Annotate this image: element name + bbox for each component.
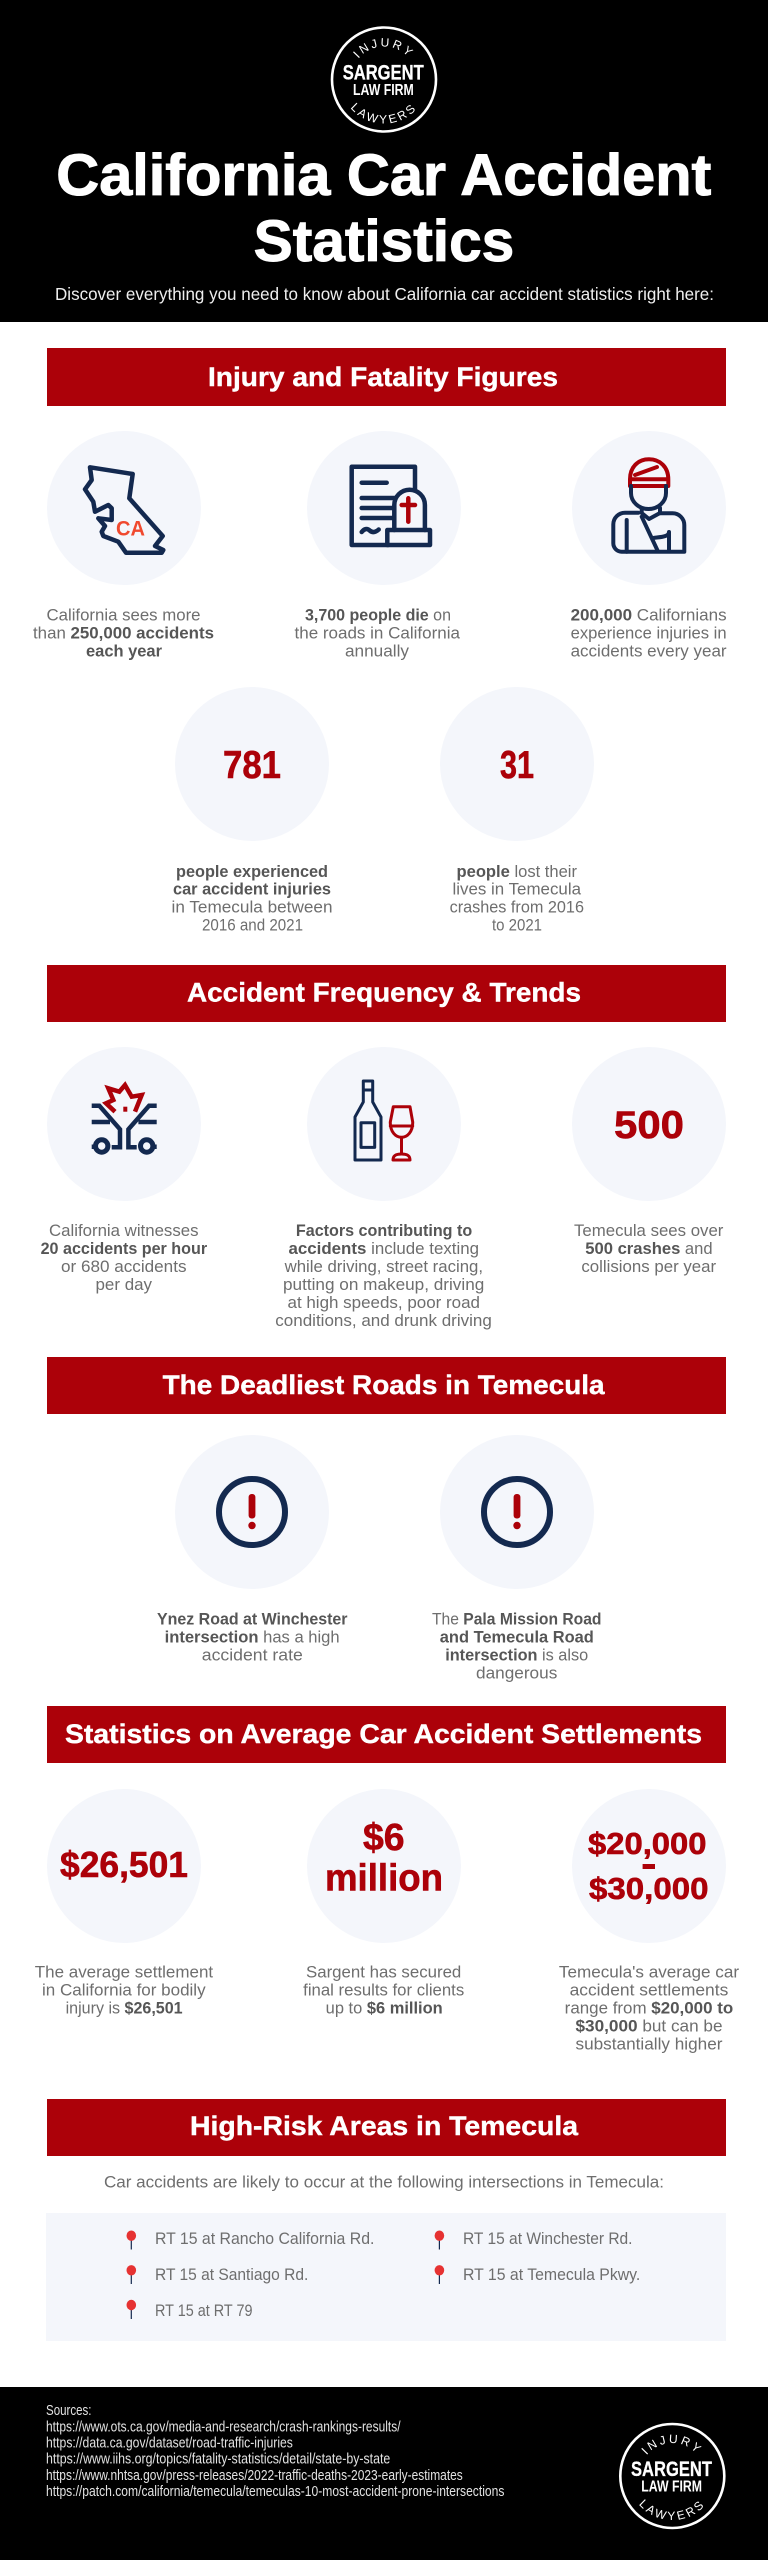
- text: 200,000 Californians: [571, 607, 727, 625]
- number: 500: [614, 1104, 684, 1147]
- text: at high speeds, poor road: [288, 1294, 480, 1312]
- intro text: Car accidents are likely to occur at the following intersections in Temecula:: [104, 2173, 664, 2191]
- text: per day: [96, 1276, 153, 1294]
- text: The Pala Mission Road: [432, 1610, 602, 1628]
- item: RT 79: [126, 2300, 252, 2320]
- number: $30,000: [589, 1871, 708, 1906]
- stat: $26,501: [35, 1789, 214, 2018]
- heading band: The Deadliest Roads in Temecula: [163, 1370, 606, 1400]
- text: people experienced: [176, 863, 328, 881]
- logo: Sargent Law Firm: LAWYERS: [639, 2499, 703, 2520]
- number: 781: [223, 744, 281, 787]
- logo: Sargent Law Firm: INJURY: [641, 2434, 702, 2454]
- number: $20,000: [588, 1826, 706, 1861]
- panel: intersections list: [46, 2213, 726, 2341]
- stat: contributing factors: [275, 1047, 492, 1330]
- text: [574, 1222, 724, 1276]
- heading band: Accident Frequency & Trends: [187, 978, 581, 1008]
- number: $6: [363, 1817, 405, 1859]
- text: 500 crashes and: [585, 1240, 713, 1258]
- icon: document and gravestone: [352, 467, 430, 545]
- text: car accident injuries: [173, 881, 331, 899]
- logo: Sargent Law Firm: LAWYERS: [350, 102, 415, 124]
- text: [33, 607, 214, 661]
- text: $30,000 but can be: [576, 2018, 722, 2036]
- logo: Sargent Law Firm: INJURY: [353, 38, 414, 58]
- text: [157, 1610, 348, 1664]
- section: Injury and Fatality Figures: [33, 348, 727, 934]
- section: Statistics on Average Car Accident Settlements: [35, 1706, 740, 2054]
- footer band: [0, 2387, 768, 2560]
- logo: Sargent Law Firm: LAW FIRM: [353, 82, 414, 99]
- text: The average settlement: [35, 1964, 214, 1982]
- stat: 250,000 accidents: [33, 431, 214, 661]
- logo: Sargent Law Firm: SARGENT: [343, 61, 424, 84]
- heading band: [47, 2099, 726, 2156]
- text: [41, 1222, 208, 1294]
- text: final results for clients: [303, 1982, 464, 2000]
- icon: California map: [85, 467, 163, 553]
- text: Temecula sees over: [574, 1222, 724, 1240]
- text: Sargent has secured: [306, 1964, 461, 1982]
- text: [559, 1964, 740, 2054]
- text: substantially higher: [576, 2036, 723, 2054]
- text: Ynez Road at Winchester: [157, 1610, 348, 1628]
- text: crashes from 2016: [450, 899, 584, 917]
- text: 20 accidents per hour: [41, 1240, 208, 1258]
- logo: Sargent Law Firm: LAW FIRM: [641, 2478, 702, 2496]
- text: in Temecula between: [172, 899, 332, 917]
- section: The Deadliest Roads in Temecula: [47, 1357, 726, 1682]
- stat: $20,000 - $30,000: [559, 1789, 740, 2054]
- text: California witnesses: [49, 1222, 198, 1240]
- icon: alert: [484, 1479, 550, 1545]
- number: $26,501: [60, 1844, 188, 1885]
- text: than 250,000 accidents: [33, 625, 214, 643]
- icon: alert: [219, 1479, 285, 1545]
- stat: 200,000 Californians: [571, 431, 727, 661]
- text: range from $20,000 to: [565, 2000, 733, 2018]
- text: injury is $26,501: [66, 2000, 183, 2018]
- text: accidents every year: [571, 643, 727, 661]
- logo: Sargent Law Firm: [330, 26, 438, 133]
- section: Accident Frequency & Trends: [41, 965, 726, 1330]
- sources: https://www.nhtsa.gov/press-releases/2022-traffic-deaths-2023-early-estimates: [46, 2468, 463, 2484]
- sources: https://data.ca.gov/dataset/road-traffic-injuries: [46, 2436, 293, 2452]
- text: and Temecula Road: [440, 1628, 594, 1646]
- road: Ynez Road: [157, 1435, 348, 1664]
- text: [35, 1964, 214, 2018]
- text: dangerous: [476, 1664, 557, 1682]
- text: each year: [86, 643, 163, 661]
- text: people lost their: [456, 863, 578, 881]
- text: intersection is also: [445, 1646, 588, 1664]
- item: Temecula Pkwy: RT 15 at Temecula Pkwy.: [463, 2266, 640, 2284]
- number: 31: [500, 744, 534, 787]
- text: 3,700 people die on: [305, 607, 451, 625]
- subtitle: Discover everything you need to know about California car accident statistics right here:: [55, 284, 714, 304]
- text: or 680 accidents: [61, 1258, 186, 1276]
- heading band: [47, 348, 726, 406]
- header band: [0, 0, 768, 322]
- item: Rancho California: RT 15 at Rancho California Rd.: [155, 2230, 374, 2248]
- text: while driving, street racing,: [284, 1258, 483, 1276]
- text: [571, 607, 727, 661]
- text: Factors contributing to: [296, 1222, 472, 1240]
- item: Santiago: RT 15 at Santiago Rd.: [155, 2266, 308, 2284]
- icon: injured person: [613, 459, 684, 552]
- item: Winchester: RT 15 at Winchester Rd.: [463, 2230, 632, 2248]
- sources: https://www.iihs.org/topics/fatality-statistics/detail/state-by-state: [46, 2452, 390, 2468]
- number: million: [325, 1858, 443, 1900]
- text: in California for bodily: [42, 1982, 206, 2000]
- stat: 500 crashes: [572, 1047, 726, 1276]
- text: experience injuries in: [571, 625, 727, 643]
- text: [172, 863, 332, 934]
- logo: Sargent Law Firm: SARGENT: [631, 2458, 712, 2481]
- text: [294, 607, 461, 661]
- heading band: Injury and Fatality Figures: [208, 362, 558, 392]
- heading band: Statistics on Average Car Accident Settlements: [65, 1719, 702, 1749]
- text: California sees more: [46, 607, 200, 625]
- section: High-Risk Areas in Temecula: [46, 2099, 726, 2341]
- text: intersection has a high: [165, 1628, 340, 1646]
- text: [275, 1222, 492, 1330]
- sources: https://patch.com/california/temecula/temeculas-10-most-accident-prone-intersections: [46, 2484, 504, 2500]
- text: [450, 863, 584, 934]
- stat: 3,700 people die: [294, 431, 461, 661]
- text: [432, 1610, 602, 1682]
- icon: wine bottle and glass: [355, 1081, 413, 1160]
- icon: car crash: [92, 1085, 157, 1152]
- number: [588, 1826, 708, 1906]
- heading band: [47, 965, 726, 1022]
- text: collisions per year: [581, 1258, 717, 1276]
- road: Pala Mission Road: [432, 1435, 602, 1682]
- logo: Sargent Law Firm: [619, 2422, 726, 2530]
- text: lives in Temecula: [452, 881, 582, 899]
- text: annually: [345, 643, 410, 661]
- title: [56, 143, 711, 274]
- text: accidents include texting: [288, 1240, 479, 1258]
- text: the roads in California: [294, 625, 461, 643]
- icon: California map: CA: [116, 517, 145, 540]
- sources: Sources:: [46, 2403, 92, 2419]
- text: up to $6 million: [326, 2000, 443, 2018]
- stat: 31 deaths: [440, 687, 594, 934]
- text: Temecula's average car: [559, 1964, 740, 1982]
- heading band: [47, 1706, 726, 1763]
- text: accident settlements: [570, 1982, 728, 2000]
- stat: 781 injuries: [172, 687, 332, 934]
- text: putting on makeup, driving: [283, 1276, 484, 1294]
- heading band: High-Risk Areas in Temecula: [190, 2111, 579, 2141]
- text: 2016 and 2021: [202, 916, 303, 934]
- sources: [46, 2403, 504, 2500]
- stat: $6 million: [303, 1789, 464, 2018]
- text: accident rate: [202, 1646, 303, 1664]
- stat: 20 accidents per hour: [41, 1047, 208, 1294]
- text: [303, 1964, 464, 2018]
- text: to 2021: [492, 916, 542, 934]
- item: RT 79: RT 15 at RT 79: [155, 2302, 252, 2320]
- title: California Car Accident: [56, 143, 711, 208]
- number: [325, 1817, 443, 1900]
- heading band: [47, 1357, 726, 1414]
- title: Statistics: [254, 209, 514, 274]
- text: conditions, and drunk driving: [275, 1312, 492, 1330]
- sources: https://www.ots.ca.gov/media-and-research/crash-rankings-results/: [46, 2419, 401, 2435]
